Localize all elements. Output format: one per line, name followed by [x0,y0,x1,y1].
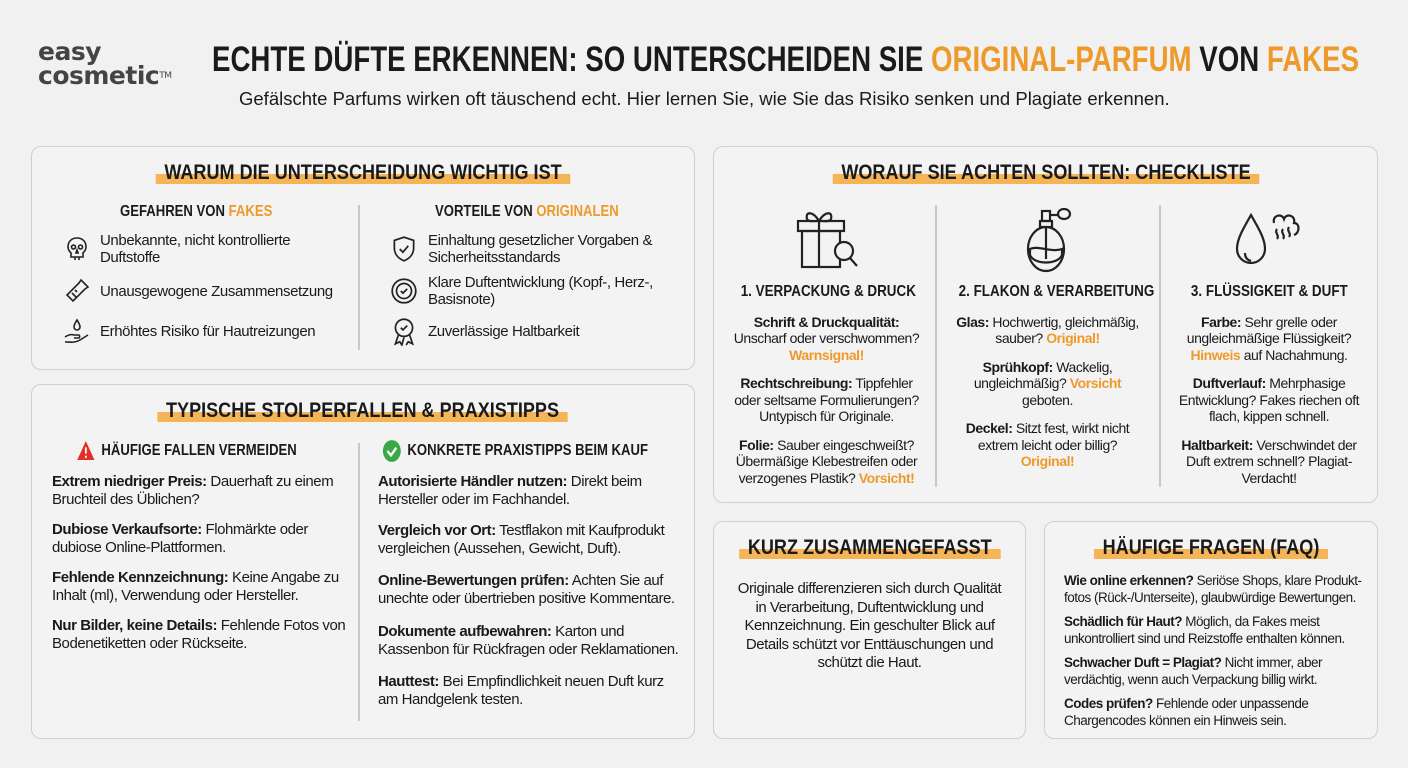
panel: warum wichtig: Unausgewogene Zusammensetzung [100,282,333,300]
panel: stolperfallen [31,384,695,739]
column 1: Warnsignal! [789,346,864,362]
panel: stolperfallen: Dubiose Verkaufsorte: Flohmärkte oder [52,521,308,538]
heading: WORAUF SIE ACHTEN SOLLTEN: CHECKLISTE [841,161,1250,184]
column 1: 1. VERPACKUNG & DRUCK [741,283,916,300]
heading: TYPISCHE STOLPERFALLEN & PRAXISTIPPS [166,399,560,422]
column 2: Original! [1021,453,1074,469]
title: ECHTE DÜFTE ERKENNEN: SO UNTERSCHEIDEN SIE ORIGINAL-PARFUM VON FAKES [212,40,1359,79]
faq list: fotos (Rück-/Unterseite), glaubwürdige Bewertungen. [1064,590,1356,604]
column 1: verzogenes Plastik? Vorsicht! [739,470,914,486]
panel: stolperfallen: am Handgelenk testen. [378,691,523,708]
column 3: Farbe: Sehr grelle oder [1201,314,1337,330]
column 3: Haltbarkeit: Verschwindet der [1181,436,1357,452]
faq list: Wie online erkennen? Seriöse Shops, klare Produkt- [1064,573,1362,588]
panel: stolperfallen: Hauttest: Bei Empfindlichkeit neuen Duft kurz [378,673,664,690]
column 2: Sprühkopf: Wackelig, [983,358,1112,374]
logo: cosmeticTM [38,61,172,90]
faq list: Codes prüfen? Fehlende oder unpassende [1064,696,1308,711]
column 1: Rechtschreibung: Tippfehler [740,375,913,391]
panel: warum wichtig: Zuverlässige Haltbarkeit [428,322,579,340]
summary text: Details schützt vor Enttäuschungen und [746,636,993,652]
panel: warum wichtig: Unbekannte, nicht kontrollierte [100,232,290,249]
subheading fallen: HÄUFIGE FALLEN VERMEIDEN [101,442,297,458]
heading: HÄUFIGE FRAGEN (FAQ) [1103,536,1319,559]
panel: warum wichtig: Erhöhtes Risiko für Hautreizungen [100,322,315,340]
panel: stolperfallen: Autorisierte Händler nutzen: Direkt beim [378,473,642,490]
panel: stolperfallen: Kassenbon für Rückfragen oder Reklamationen. [378,641,678,658]
list originale [391,232,653,346]
faq list: Schädlich für Haut? Möglich, da Fakes meist [1064,614,1319,629]
panel: checkliste [713,146,1378,503]
summary text: schützt die Haut. [817,654,922,671]
column 1: Folie: Sauber eingeschweißt? [739,436,914,452]
column 1: oder seltsame Formulierungen? [734,392,919,408]
tips praxis [378,473,678,708]
panel: stolperfallen: Hersteller oder im Fachhandel. [378,491,570,508]
column 1: Unscharf oder verschwommen? [734,330,919,346]
icon: perfume bottle [1026,208,1072,272]
summary text: in Verarbeitung, Duftentwicklung und [755,598,984,616]
panel: warum wichtig: Basisnote) [428,291,495,308]
logo: easy [38,37,101,66]
panel: warum wichtig: Klare Duftentwicklung (Kopf-, Herz-, [428,274,653,291]
faq list: verdächtig, wenn auch Verpackung billig wirkt. [1064,672,1317,686]
column 2: geboten. [1022,392,1073,408]
column 3: ungleichmäßige Flüssigkeit? [1187,330,1351,346]
column 2: ungleichmäßig? Vorsicht [974,375,1121,391]
panel: stolperfallen: vergleichen (Aussehen, Gewicht, Duft). [378,540,621,557]
column 1 [734,283,920,486]
column 2: 2. FLAKON & VERARBEITUNG [959,283,1154,300]
subheading praxistipps: KONKRETE PRAXISTIPPS BEIM KAUF [407,442,648,459]
faq list: unkontrolliert sind und Reizstoffe enthalten können. [1064,630,1345,646]
panel: stolperfallen: Fehlende Kennzeichnung: Keine Angabe zu [52,569,339,586]
column 3: Entwicklung? Fakes riechen oft [1179,392,1359,408]
column 3: Verdacht! [1241,470,1297,486]
column 2: Deckel: Sitzt fest, wirkt nicht [966,420,1129,436]
heading: WARUM DIE UNTERSCHEIDUNG WICHTIG IST [164,161,562,184]
icon: gift with magnifier [796,212,858,268]
summary text: Originale differenzieren sich durch Qualität [738,580,1001,597]
panel: stolperfallen: Nur Bilder, keine Details: Fehlende Fotos von [52,617,345,634]
subheading originale: VORTEILE VON ORIGINALEN [435,203,619,220]
summary text [738,580,1002,671]
panel: warum wichtig: Duftstoffe [100,249,160,266]
panel: stolperfallen: Bruchteil des Üblichen? [52,491,199,508]
faq list: Schwacher Duft = Plagiat? Nicht immer, aber [1064,655,1322,670]
column 2: Glas: Hochwertig, gleichmäßig, [956,314,1139,330]
panel: stolperfallen: Extrem niedriger Preis: Dauerhaft zu einem [52,473,333,490]
panel: stolperfallen: unechte oder übertrieben positive Kommentare. [378,590,675,607]
subtitle: Gefälschte Parfums wirken oft täuschend echt. Hier lernen Sie, wie Sie das Risiko senken und Plagiate erkennen. [239,88,1170,109]
subheading fakes: GEFAHREN VON FAKES [120,203,272,220]
panel: stolperfallen: Online-Bewertungen prüfen: Achten Sie auf [378,572,663,589]
column 3: Duft extrem schnell? Plagiat- [1186,453,1352,469]
panel: kurz zusammengefasst [713,521,1026,739]
column 3: flach, kippen schnell. [1209,408,1329,424]
column 1: Schrift & Druckqualität: [754,314,899,330]
panel: stolperfallen: Vergleich vor Ort: Testflakon mit Kaufprodukt [378,522,664,539]
tips fallen [52,473,345,652]
faq list: Chargencodes können ein Hinweis sein. [1064,712,1286,728]
column 1: Untypisch für Originale. [759,408,894,424]
faq list [1064,573,1362,728]
summary text: Kennzeichnung. Ein geschulter Blick auf [744,617,995,634]
panel: warum wichtig: Sicherheitsstandards [428,249,560,266]
column 3: Hinweis auf Nachahmung. [1190,346,1347,362]
logo [38,37,172,90]
panel: stolperfallen: dubiose Online-Plattformen. [52,539,226,556]
panel: faq [1044,521,1378,739]
panel: warum wichtig: Einhaltung gesetzlicher Vorgaben & [428,232,652,249]
column 2 [956,283,1154,469]
panel: stolperfallen: Bodenetiketten oder Rückseite. [52,635,247,652]
list fakes [64,232,333,343]
column 1: Übermäßige Klebestreifen oder [736,453,917,469]
panel: stolperfallen: Dokumente aufbewahren: Karton und [378,623,624,640]
heading: KURZ ZUSAMMENGEFASST [748,536,991,559]
column 2: extrem leicht oder billig? [978,436,1117,452]
panel: stolperfallen: Inhalt (ml), Verwendung oder Hersteller. [52,587,298,604]
column 3: Duftverlauf: Mehrphasige [1193,375,1345,391]
column 2: sauber? Original! [995,330,1100,346]
panel: warum wichtig [31,146,695,370]
column 3 [1179,282,1360,486]
icon: drop and vapour [1236,212,1300,264]
column 3: 3. FLÜSSIGKEIT & DUFT [1191,283,1347,300]
